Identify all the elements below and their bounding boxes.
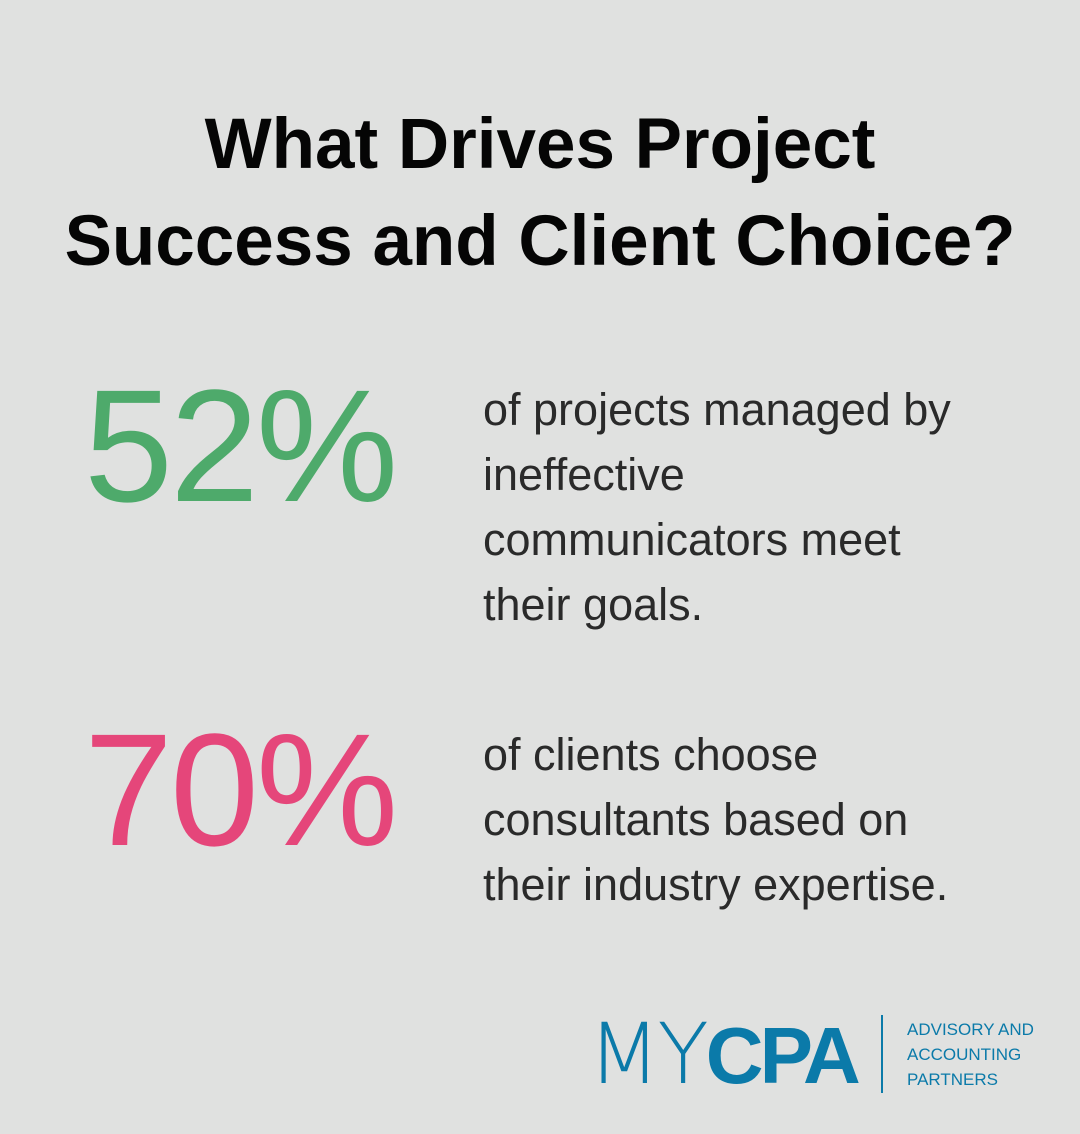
logo tagline — [907, 1020, 1034, 1089]
text: 70% description: consultants based on — [483, 794, 908, 845]
title: Success and Client Choice? — [65, 202, 1015, 281]
text: 52% description: communicators meet — [483, 514, 901, 565]
title — [65, 105, 1015, 281]
stat: 70%: 70% — [84, 700, 395, 879]
logo wordmark: MYCPA — [588, 1005, 857, 1103]
text: 70% description: of clients choose — [483, 729, 818, 780]
text: 52% description: ineffective — [483, 449, 685, 500]
text: 70% description — [483, 729, 948, 910]
title: What Drives Project — [205, 105, 875, 184]
logo — [588, 1005, 1034, 1103]
text: 52% description: their goals. — [483, 579, 703, 630]
text: 70% description: their industry expertise. — [483, 859, 948, 910]
logo tagline: ACCOUNTING — [907, 1045, 1021, 1064]
text: 52% description — [483, 384, 951, 630]
text: 52% description: of projects managed by — [483, 384, 951, 435]
stat: 52%: 52% — [84, 356, 395, 535]
logo tagline: PARTNERS — [907, 1070, 998, 1089]
logo tagline: ADVISORY AND — [907, 1020, 1034, 1039]
